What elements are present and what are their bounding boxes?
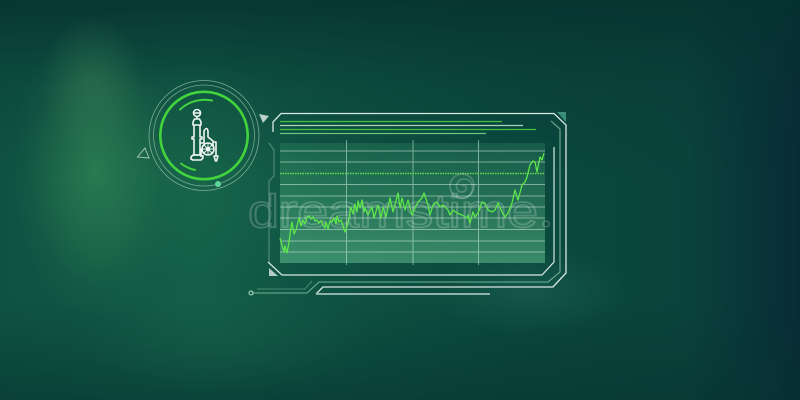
hydraulic pump icon <box>191 110 218 161</box>
watermark: dreamstime <box>248 185 538 237</box>
threshold dotted line <box>280 172 545 174</box>
header lines <box>280 122 536 134</box>
outer tech frame <box>249 114 566 295</box>
watermark <box>248 174 549 237</box>
triangle marker <box>138 148 149 158</box>
inner arcs <box>180 100 212 170</box>
indicator dot <box>215 181 221 187</box>
gauge badge <box>149 80 259 190</box>
chart grid <box>280 140 545 265</box>
chart panel <box>248 140 549 265</box>
frame corner markers <box>259 112 566 276</box>
line chart <box>280 153 544 253</box>
